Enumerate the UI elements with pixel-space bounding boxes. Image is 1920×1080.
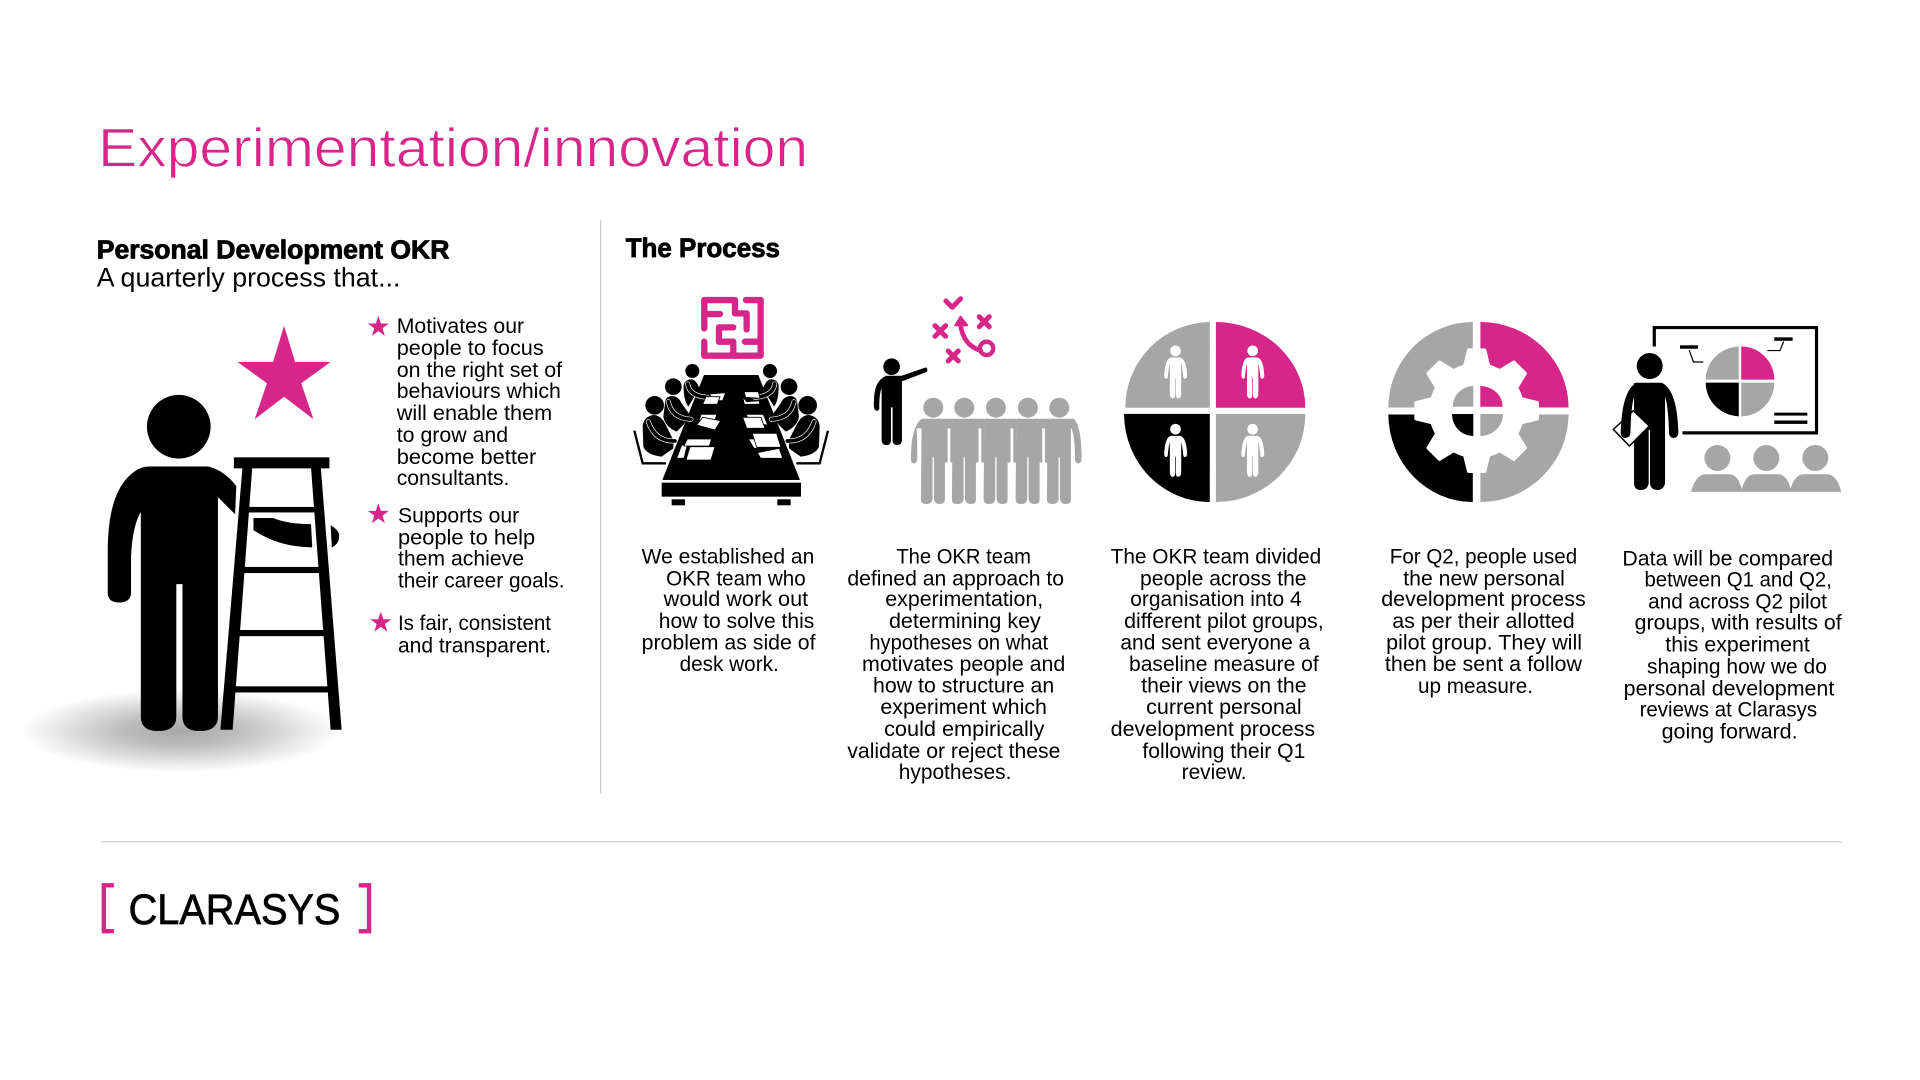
icon: presenter xyxy=(874,358,927,445)
text: step 4: up measure. xyxy=(1418,675,1533,698)
audience xyxy=(1691,445,1841,492)
text: step 2: motivates people and xyxy=(862,653,1065,676)
icon: person with ladder xyxy=(108,395,342,731)
bullet: fair xyxy=(370,612,551,657)
icon: big star xyxy=(238,326,331,419)
chart labels xyxy=(1680,337,1807,424)
bullet: fair: and transparent. xyxy=(398,634,551,657)
text: step 2: validate or reject these xyxy=(847,740,1060,763)
text: step 5: groups, with results of xyxy=(1635,611,1842,634)
subheading: A quarterly process that... xyxy=(97,263,400,293)
text: step 3: The OKR team divided xyxy=(1111,545,1321,568)
bullet: motivates xyxy=(368,315,562,490)
text: step 5: personal development xyxy=(1624,678,1835,701)
bullet: motivates: Motivates our xyxy=(397,315,524,338)
bullet: motivates: to grow and xyxy=(397,424,508,447)
text: step 3: their views on the xyxy=(1141,674,1307,697)
presenter figure with clipboard xyxy=(1613,353,1678,490)
text: step 3: review. xyxy=(1182,761,1247,784)
bullet: motivates: consultants. xyxy=(397,467,509,490)
text: step 2 xyxy=(847,545,1065,784)
text: step 5: and across Q2 pilot xyxy=(1648,591,1827,614)
text: step 1: how to solve this xyxy=(659,610,814,633)
bullet: supports: people to help xyxy=(398,527,535,550)
mini pie chart xyxy=(1706,347,1774,416)
text: step 5: between Q1 and Q2, xyxy=(1644,569,1832,592)
bullet: motivates: become better xyxy=(397,446,536,469)
text: step 4: pilot group. They will xyxy=(1386,632,1582,655)
icon: presenter with chart and audience xyxy=(1613,328,1841,492)
text: step 1: problem as side of xyxy=(642,632,816,655)
text: step 2: experiment which xyxy=(880,696,1047,719)
text: step 1: desk work. xyxy=(680,653,779,676)
panel: personal development OKR xyxy=(21,236,564,773)
text: step 5: Data will be compared xyxy=(1622,548,1833,571)
heading: personal development OKR: Personal Development OKR xyxy=(97,236,450,264)
icon: quadrant pie with gear xyxy=(1388,322,1569,502)
text: step 2: experimentation, xyxy=(885,588,1043,611)
text: step 2: how to structure an xyxy=(873,674,1054,697)
bullet: motivates: people to focus xyxy=(397,337,544,360)
icon: presenter, tactics and team xyxy=(874,299,1082,504)
text: step 4: For Q2, people used xyxy=(1390,545,1577,568)
text: step 1: OKR team who xyxy=(666,567,806,590)
text: step 4: then be sent a follow xyxy=(1385,653,1583,676)
bullet: fair: Is fair, consistent xyxy=(398,612,551,635)
icon: quadrant pie with people xyxy=(1124,322,1305,502)
text: step 3: baseline measure of xyxy=(1129,653,1319,676)
text: step 2: hypotheses on what xyxy=(869,632,1048,655)
icon: maze xyxy=(704,300,761,356)
text: step 5: shaping how we do xyxy=(1647,655,1827,678)
text: step 4: as per their allotted xyxy=(1392,610,1575,633)
text: step 5: this experiment xyxy=(1665,633,1810,656)
text: step 1: We established an xyxy=(642,545,814,568)
bullet: supports xyxy=(368,503,564,592)
text: step 3: current personal xyxy=(1146,696,1302,719)
text: step 3: different pilot groups, xyxy=(1124,610,1324,633)
chart board xyxy=(1654,328,1817,433)
text: step 2: defined an approach to xyxy=(847,567,1064,590)
bullet: motivates: on the right set of xyxy=(397,359,562,382)
text: step 2: hypotheses. xyxy=(899,761,1011,784)
icon: tactics xyxy=(935,299,993,361)
bullet: motivates: will enable them xyxy=(396,402,552,425)
text: step 5 xyxy=(1622,548,1842,743)
text: step 3 xyxy=(1111,545,1324,784)
text: step 3: people across the xyxy=(1140,567,1307,590)
text: step 3: following their Q1 xyxy=(1142,740,1305,763)
text: step 4 xyxy=(1381,545,1586,698)
text: step 2: determining key xyxy=(889,610,1041,633)
text: step 3: development process xyxy=(1111,718,1315,741)
text: step 4: development process xyxy=(1381,588,1586,611)
text: step 3: and sent everyone a xyxy=(1120,632,1311,655)
text: step 2: The OKR team xyxy=(896,545,1031,568)
text: step 5: going forward. xyxy=(1662,720,1798,743)
icon: team xyxy=(911,398,1082,504)
heading: the process: The Process xyxy=(626,233,780,263)
title: Experimentation/innovation xyxy=(98,118,808,179)
text: step 5: reviews at Clarasys xyxy=(1640,698,1817,721)
bullet: supports: their career goals. xyxy=(398,569,564,592)
bullet: motivates: behaviours which xyxy=(397,380,561,403)
logo: Clarasys: CLARASYS xyxy=(129,886,340,934)
bullet: supports: them achieve xyxy=(398,547,524,570)
text: step 1 xyxy=(642,545,816,676)
text: step 2: could empirically xyxy=(884,718,1045,741)
bullet: supports: Supports our xyxy=(398,504,519,527)
icon: meeting table xyxy=(634,364,828,505)
text: step 1: would work out xyxy=(663,588,808,611)
floor shadow xyxy=(21,689,339,773)
text: step 3: organisation into 4 xyxy=(1130,588,1302,611)
text: step 4: the new personal xyxy=(1403,567,1565,590)
